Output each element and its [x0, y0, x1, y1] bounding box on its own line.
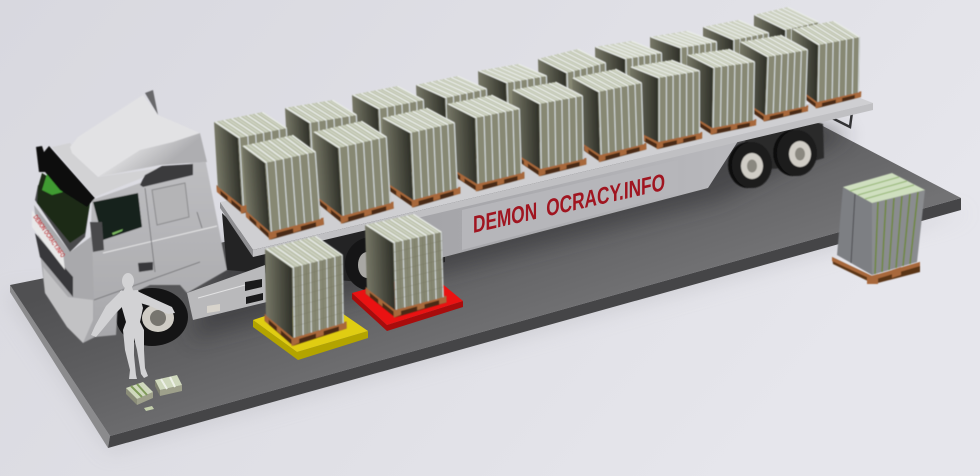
truck cab [31, 90, 227, 343]
money bundles on floor [126, 375, 182, 411]
back pallet 4 [415, 76, 492, 167]
floor slab [4, 123, 970, 452]
back pallet 10 [752, 7, 821, 86]
front pallet 9 [736, 35, 810, 122]
handle [138, 262, 153, 272]
windshield reflection [42, 174, 63, 195]
red pad [352, 272, 463, 331]
sign text: DEMON OCRACY.INFO [473, 169, 665, 239]
front pallet 3 [381, 108, 461, 208]
front pallet 5 [511, 82, 586, 176]
spoiler tip [145, 90, 158, 115]
truck chassis skirt [187, 265, 267, 320]
front pallet 8 [685, 49, 757, 135]
mirror [90, 222, 104, 252]
front pallet 7 [629, 60, 702, 149]
black visor [36, 146, 95, 207]
lower front [43, 267, 93, 343]
fairing lower band [98, 133, 207, 177]
back pallet 5 [477, 64, 551, 150]
side window [93, 193, 142, 240]
trailer side body [405, 138, 740, 262]
back row of pallets [213, 7, 821, 214]
front pallet 2 [312, 121, 394, 224]
back pallet 7 [594, 41, 665, 121]
flat deck [220, 96, 873, 257]
back pallet 8 [648, 31, 719, 108]
back pallet 6 [537, 49, 610, 138]
human figure [91, 273, 175, 379]
lone pallet at right [832, 173, 925, 284]
plate [32, 210, 65, 270]
door window [152, 183, 189, 225]
front pallet 10 [790, 21, 862, 109]
front pallet 1 [241, 135, 324, 240]
windshield frame [35, 185, 90, 252]
roof lower [52, 143, 160, 197]
yellow pad [253, 298, 368, 360]
rear wheels [728, 120, 824, 188]
plate text: DEMON OCRACY.INFO [31, 214, 66, 259]
under deck chassis [222, 210, 445, 291]
window highlight [112, 229, 123, 235]
pallet on yellow pad [264, 236, 347, 346]
front face [34, 205, 95, 343]
sign panel [462, 160, 678, 250]
back pallet 9 [702, 20, 771, 98]
back pallet 1 [213, 112, 294, 214]
stand bracket [828, 112, 852, 127]
front row of pallets [241, 21, 862, 240]
cab front wheel [116, 288, 188, 346]
pallet on red pad [364, 214, 447, 318]
door lines [103, 226, 217, 253]
roof fairing [70, 95, 207, 177]
front pallet 4 [446, 95, 524, 192]
back pallet 2 [284, 100, 363, 196]
front pallet 6 [571, 69, 646, 162]
windshield [37, 173, 90, 243]
back pallet 3 [351, 86, 430, 180]
sun shade [140, 164, 193, 187]
grille band [35, 233, 73, 297]
cab side [88, 158, 227, 337]
